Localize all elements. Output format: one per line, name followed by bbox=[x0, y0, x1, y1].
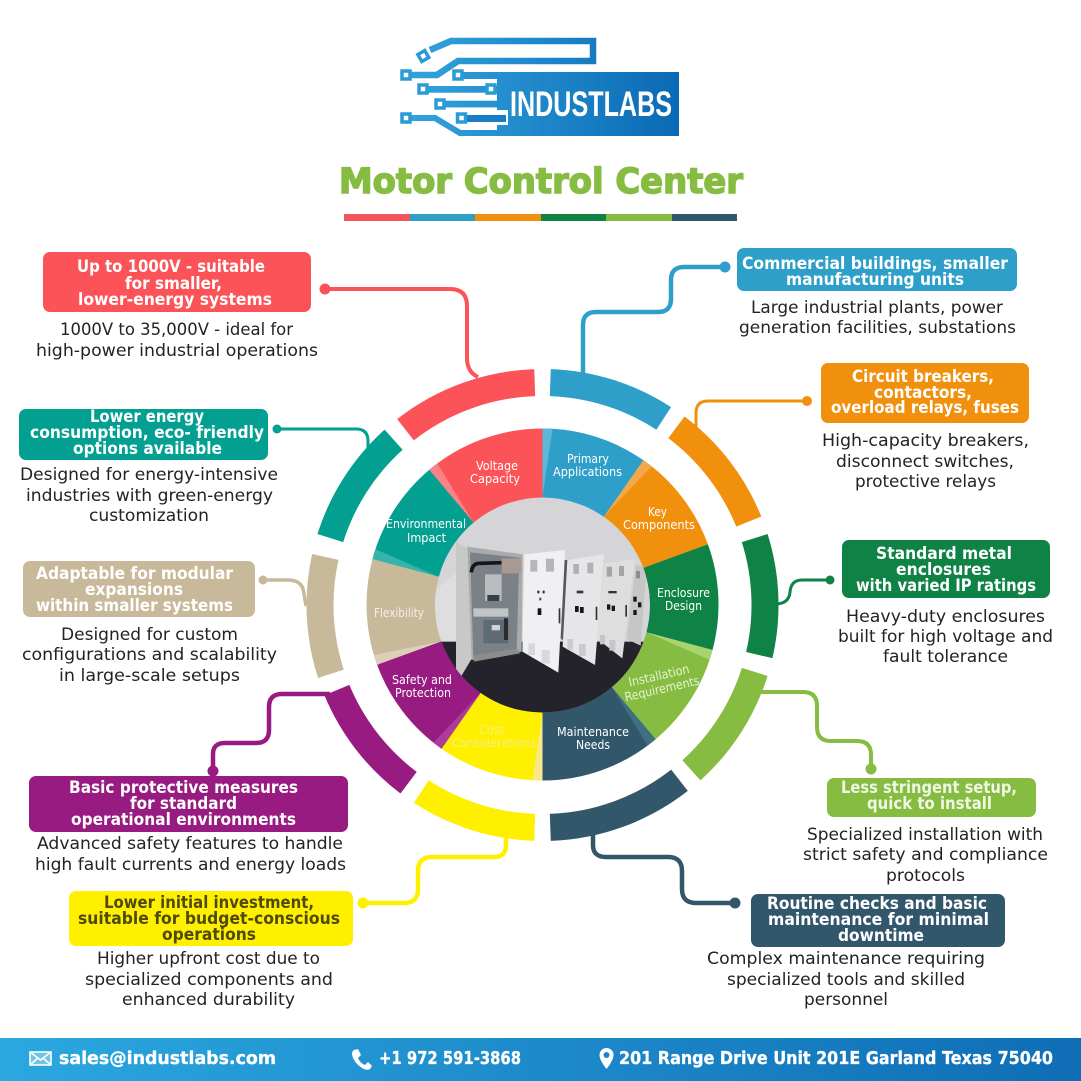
callout: flexibility low: Adaptable for modular bbox=[36, 564, 234, 584]
panel: environmental impact bbox=[19, 407, 368, 526]
panel: key components bbox=[696, 363, 1029, 492]
callout: enclosure low: Standard metal bbox=[876, 544, 1012, 564]
text: components high: High-capacity breakers, bbox=[822, 431, 1029, 451]
text: cost high bbox=[85, 949, 333, 1010]
text: environmental high bbox=[20, 465, 278, 526]
pie labels: Flexibility bbox=[374, 605, 425, 620]
panel: flexibility bbox=[22, 561, 306, 686]
text: enclosure high: fault tolerance bbox=[883, 647, 1008, 667]
callout: environmental low: Lower energy bbox=[90, 407, 204, 427]
callout: enclosure low: with varied IP ratings bbox=[856, 576, 1036, 596]
connector: applications bbox=[583, 262, 730, 374]
callout: cost low: suitable for budget-conscious bbox=[78, 909, 340, 929]
text: cost high: Higher upfront cost due to bbox=[97, 949, 320, 969]
callout: maintenance low bbox=[751, 894, 1005, 947]
pie labels: Installation bbox=[627, 661, 691, 690]
callout: voltage low: for smaller, bbox=[125, 274, 222, 294]
callout: cost low: Lower initial investment, bbox=[104, 893, 314, 913]
text: safety high bbox=[35, 834, 346, 875]
footer phone: +1 972 591-3868 bbox=[379, 1048, 521, 1069]
pie labels: Requirements bbox=[623, 673, 701, 704]
connector: cost bbox=[358, 834, 506, 908]
text: enclosure high: Heavy-duty enclosures bbox=[846, 607, 1045, 627]
callout: environmental low bbox=[19, 407, 268, 460]
text: maintenance high: specialized tools and skilled bbox=[727, 970, 965, 990]
text: flexibility high bbox=[22, 625, 277, 686]
text: maintenance high bbox=[707, 949, 985, 1010]
text: components high bbox=[822, 431, 1029, 492]
connector: maintenance bbox=[593, 834, 740, 908]
text: voltage high bbox=[36, 320, 318, 361]
text: maintenance high: personnel bbox=[804, 990, 888, 1010]
pie labels: Capacity bbox=[470, 471, 521, 486]
outer ring segments bbox=[320, 383, 765, 827]
callout: applications low: Commercial buildings, smaller bbox=[742, 254, 1009, 274]
connector: components bbox=[696, 396, 812, 428]
callout: environmental low: options available bbox=[73, 439, 222, 459]
icon: phone bbox=[352, 1049, 372, 1070]
callout: flexibility low: expansions bbox=[85, 580, 183, 600]
callout: cost low: operations bbox=[162, 925, 256, 945]
callout: flexibility low bbox=[23, 561, 255, 617]
text: installation high: protocols bbox=[886, 866, 965, 886]
panel: enclosure design bbox=[775, 540, 1053, 667]
text: environmental high: industries with green-energy bbox=[26, 486, 273, 506]
connector: environmental bbox=[272, 424, 368, 449]
pie labels: Impact bbox=[407, 530, 446, 545]
pie labels: Maintenance bbox=[557, 724, 629, 739]
footer bar bbox=[0, 1038, 1081, 1081]
pie labels: Design bbox=[665, 598, 702, 613]
text: applications high bbox=[739, 298, 1016, 338]
callout: installation low bbox=[827, 778, 1036, 817]
icon: location pin bbox=[600, 1048, 614, 1069]
connector: flexibility bbox=[258, 576, 306, 606]
text: installation high: strict safety and compliance bbox=[803, 845, 1048, 865]
text: flexibility high: Designed for custom bbox=[61, 625, 238, 645]
pie labels: Environmental bbox=[386, 516, 466, 531]
callout: components low: contactors, bbox=[874, 383, 972, 403]
callout: voltage low: lower-energy systems bbox=[78, 290, 272, 310]
pie labels: Components bbox=[623, 517, 695, 532]
text: flexibility high: in large-scale setups bbox=[59, 666, 240, 686]
panel: cost considerations bbox=[69, 834, 506, 1010]
pie labels: Needs bbox=[576, 737, 610, 752]
pie labels: Key bbox=[648, 504, 667, 519]
pie labels: Primary bbox=[567, 451, 610, 466]
text: cost high: enhanced durability bbox=[122, 990, 295, 1010]
callout: enclosure low bbox=[842, 540, 1050, 598]
text: components high: disconnect switches, bbox=[836, 452, 1014, 472]
text: voltage high: 1000V to 35,000V - ideal for bbox=[60, 320, 293, 340]
callout: voltage low bbox=[43, 252, 311, 312]
panel: safety and protection bbox=[29, 694, 348, 875]
callout: safety low: Basic protective measures bbox=[69, 778, 298, 798]
pie labels: Safety and bbox=[392, 672, 452, 687]
text: environmental high: customization bbox=[89, 506, 209, 526]
text: applications high: generation facilities, substations bbox=[739, 318, 1016, 338]
callout: safety low: operational environments bbox=[71, 810, 296, 830]
center photo: motor control cabinets bbox=[430, 498, 657, 722]
panel: maintenance needs bbox=[593, 834, 1005, 1010]
text: applications high: Large industrial plants, power bbox=[751, 298, 1003, 318]
callout: maintenance low: Routine checks and basic bbox=[767, 894, 987, 914]
callout: applications low: manufacturing units bbox=[786, 270, 964, 290]
callout: flexibility low: within smaller systems bbox=[36, 596, 233, 616]
callout: voltage low: Up to 1000V - suitable bbox=[77, 257, 265, 277]
callout: safety low: for standard bbox=[130, 794, 237, 814]
pie labels: Applications bbox=[553, 464, 622, 479]
callout: components low bbox=[821, 363, 1029, 423]
connector: installation bbox=[758, 692, 876, 774]
callout: safety low bbox=[29, 776, 348, 832]
callout: components low: overload relays, fuses bbox=[831, 398, 1019, 418]
text: cost high: specialized components and bbox=[85, 970, 333, 990]
callout: installation low: quick to install bbox=[867, 794, 992, 814]
pie chart: ten topics bbox=[367, 428, 718, 781]
callout: cost low bbox=[69, 891, 353, 946]
text: environmental high: Designed for energy-intensive bbox=[20, 465, 278, 485]
pie labels: Enclosure bbox=[657, 585, 710, 600]
pie labels: Voltage bbox=[476, 458, 518, 473]
callout: installation low: Less stringent setup, bbox=[841, 778, 1017, 798]
callout: applications low bbox=[737, 248, 1017, 291]
logo wordmark: INDUSTLABS bbox=[510, 85, 672, 124]
title: Motor Control Center bbox=[339, 162, 744, 202]
pie labels bbox=[374, 451, 710, 752]
text: maintenance high: Complex maintenance requiring bbox=[707, 949, 985, 969]
text: voltage high: high-power industrial operations bbox=[36, 341, 318, 361]
panel: voltage capacity bbox=[36, 252, 478, 377]
text: safety high: high fault currents and energy loads bbox=[35, 855, 346, 875]
pie labels: Protection bbox=[395, 685, 451, 700]
title color bar bbox=[344, 214, 737, 221]
text: installation high bbox=[803, 825, 1048, 886]
text: installation high: Specialized installation with bbox=[807, 825, 1043, 845]
panel: installation requirements bbox=[758, 692, 1048, 886]
connector: safety bbox=[208, 694, 330, 776]
text: flexibility high: configurations and scalability bbox=[22, 645, 277, 665]
text: enclosure high: built for high voltage and bbox=[838, 627, 1053, 647]
panel: primary applications bbox=[583, 248, 1017, 374]
callout: environmental low: consumption, eco- friendly bbox=[30, 423, 264, 443]
callout: components low: Circuit breakers, bbox=[852, 367, 994, 387]
pie labels: Considerations bbox=[452, 735, 536, 750]
callout: maintenance low: maintenance for minimal bbox=[768, 910, 989, 930]
text: safety high: Advanced safety features to handle bbox=[37, 834, 343, 854]
logo: Industlabs circuit mark bbox=[402, 41, 679, 136]
footer email: sales@industlabs.com bbox=[59, 1048, 276, 1069]
text: components high: protective relays bbox=[855, 472, 996, 492]
callout: maintenance low: downtime bbox=[838, 926, 924, 946]
connector: voltage bbox=[320, 284, 478, 377]
pie labels: Cost bbox=[479, 722, 505, 737]
callout: enclosure low: enclosures bbox=[896, 560, 991, 580]
icon: envelope bbox=[30, 1052, 51, 1065]
text: enclosure high bbox=[838, 607, 1053, 667]
connector: enclosure bbox=[775, 576, 834, 604]
